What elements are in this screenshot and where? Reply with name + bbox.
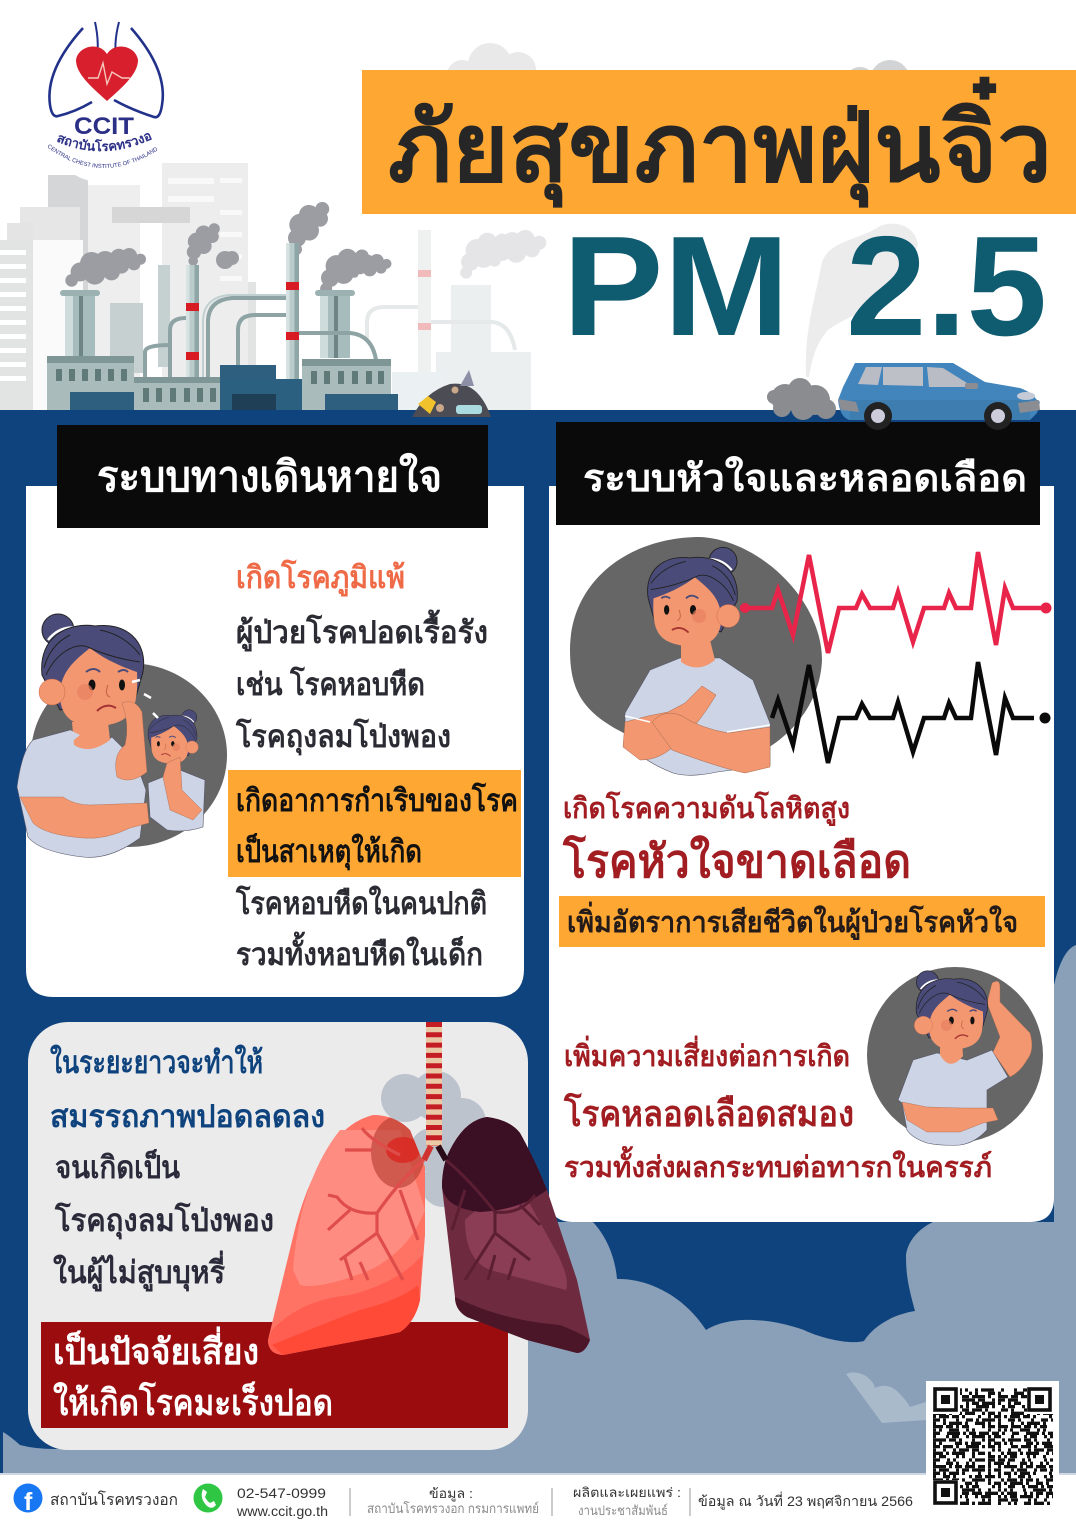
smoke plumes	[65, 194, 392, 297]
risk box: ให้เกิดโรคมะเร็งปอด	[53, 1380, 333, 1423]
faded background: city buildings	[0, 163, 256, 410]
long term text: ในผู้ไม่สูบบุหรี่	[53, 1250, 225, 1292]
risk box: เป็นปัจจัยเสี่ยง	[53, 1326, 259, 1372]
data source credit	[367, 1486, 539, 1516]
ecg line: black	[772, 662, 1050, 763]
panel: cardiovascular system	[549, 422, 1054, 1222]
car and exhaust	[767, 363, 1040, 430]
logo: CENTRAL CHEST INSTITUTE OF THAILAND	[48, 144, 157, 168]
right lung: damaged	[442, 1117, 590, 1353]
panel: long term lung effects	[28, 1022, 590, 1450]
contact details: 02-547-0999	[237, 1486, 326, 1501]
publisher credit: งานประชาสัมพันธ์	[578, 1503, 668, 1518]
heading bar: cardiovascular: ระบบหัวใจและหลอดเลือด	[583, 456, 1027, 500]
lungs illustration	[268, 1022, 590, 1355]
heading bar: cardiovascular	[556, 422, 1040, 525]
publisher credit: ผลิตและเผยแพร่ :	[573, 1485, 681, 1500]
ecg line: red	[740, 552, 1052, 653]
panel: respiratory system	[17, 425, 524, 997]
icon: phone	[194, 1484, 222, 1512]
risk box	[41, 1322, 508, 1428]
illustration: mother and child coughing	[17, 614, 227, 857]
illustration: woman holding chest	[570, 537, 822, 775]
cardiovascular text	[559, 790, 1045, 1184]
respiratory text lines: ผู้ป่วยโรคปอดเรื้อรัง	[236, 609, 488, 652]
respiratory text lines: เกิดโรคภูมิแพ้	[236, 559, 405, 597]
background cloud: blue grey	[3, 945, 1076, 1474]
dust cloud	[381, 1071, 486, 1207]
cardiovascular text: เพิ่มความเสี่ยงต่อการเกิด	[564, 1035, 850, 1073]
respiratory text lines: เป็นสาเหตุให้เกิด	[236, 832, 422, 871]
background cloud: light accent	[846, 1372, 926, 1423]
cardiovascular text: เพิ่มอัตราการเสียชีวิตในผู้ป่วยโรคหัวใจ	[567, 901, 1018, 940]
title: PM 2.5	[562, 207, 1047, 366]
respiratory text lines: โรคหอบหืดในคนปกติ	[235, 885, 487, 921]
title banner: ภัยสุขภาพฝุ่นจิ๋ว	[388, 76, 1052, 208]
heading bar: respiratory: ระบบทางเดินหายใจ	[97, 452, 442, 500]
icon: facebook: f	[24, 1488, 33, 1516]
title: PM 2.5: PM	[562, 207, 790, 366]
logo: CCIT	[74, 113, 134, 140]
publisher credit	[573, 1485, 681, 1518]
heading bar: respiratory	[57, 425, 488, 528]
title banner	[362, 70, 1076, 214]
left lung: healthy	[268, 1115, 425, 1355]
pipes	[145, 298, 376, 380]
faded background: smoke behind title	[447, 43, 918, 377]
contact details: www.ccit.go.th	[236, 1504, 328, 1519]
data source credit: สถาบันโรคทรวงอก กรมการแพทย์	[367, 1501, 539, 1516]
long term text	[50, 1044, 325, 1292]
respiratory text lines: เช่น โรคหอบหืด	[236, 666, 425, 702]
data source credit: ข้อมูล :	[429, 1486, 473, 1502]
cardiovascular text: โรคหัวใจขาดเลือด	[562, 834, 911, 887]
respiratory text lines: โรคถุงลมโป่งพอง	[235, 718, 451, 756]
right building	[302, 359, 391, 410]
cardiovascular text: เกิดโรคความดันโลหิตสูง	[563, 790, 850, 826]
facebook name: สถาบันโรคทรวงอก	[50, 1490, 178, 1509]
centre building	[134, 377, 222, 410]
respiratory text lines	[235, 559, 518, 972]
qr code	[926, 1381, 1059, 1516]
title: PM 2.5: 2.5	[846, 207, 1047, 366]
cardiovascular text: รวมทั้งส่งผลกระทบต่อทารกในครรภ์	[564, 1145, 992, 1184]
trachea	[424, 1022, 446, 1160]
red bands	[186, 282, 299, 360]
respiratory text lines: เกิดอาการกำเริบของโรค	[236, 782, 518, 818]
faded background: factory right	[367, 225, 548, 410]
qr finder patterns	[933, 1387, 1054, 1507]
date: ข้อมูล ณ วันที่ 23 พฤศจิกายน 2566	[698, 1492, 913, 1510]
logo	[48, 22, 164, 180]
long term text: โรคถุงลมโป่งพอง	[54, 1202, 274, 1240]
long term text: จนเกิดเป็น	[55, 1148, 180, 1185]
highlight box	[228, 770, 521, 877]
respiratory text lines: รวมทั้งหอบหืดในเด็ก	[236, 931, 483, 972]
footer	[0, 1473, 1076, 1522]
long term text: สมรรถภาพปอดลดลง	[50, 1099, 325, 1134]
garbage pile	[412, 370, 491, 417]
stacks	[186, 265, 199, 385]
towers	[60, 290, 100, 358]
long term text: ในระยะยาวจะทำให้	[50, 1044, 263, 1080]
contact details	[236, 1486, 328, 1519]
left building	[47, 356, 134, 410]
factory illustration	[47, 194, 398, 410]
cardiovascular text: โรคหลอดเลือดสมอง	[563, 1092, 854, 1134]
illustration: woman with headache	[867, 967, 1043, 1145]
icon: facebook	[14, 1484, 42, 1516]
